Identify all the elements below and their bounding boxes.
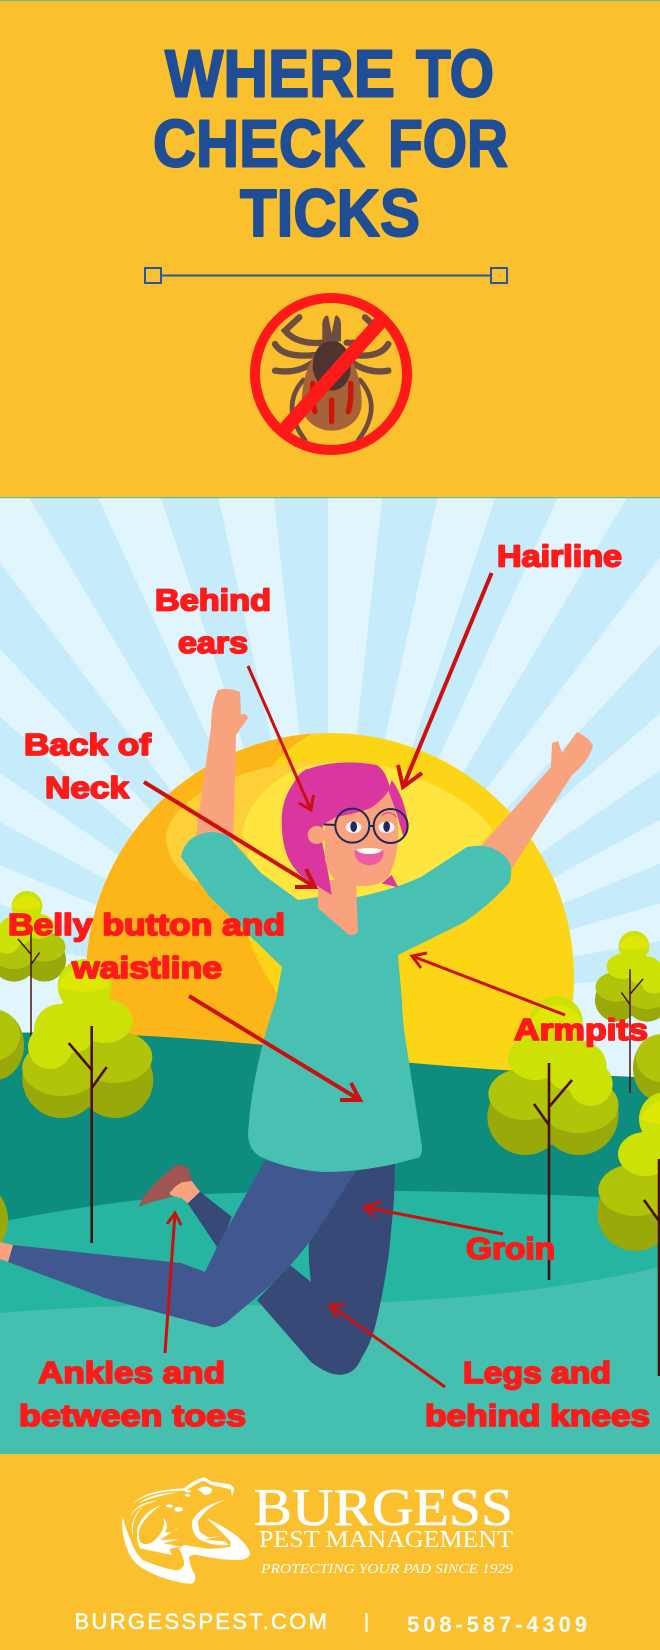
label: back of neck: Neck: [45, 771, 129, 805]
label: ankles and between toes: between toes: [19, 1399, 246, 1433]
label: legs and behind knees: behind knees: [425, 1399, 650, 1433]
icon: Burgess frog logo: [122, 1477, 250, 1584]
tree: right edge partial: [633, 1034, 660, 1101]
arrow: armpits: [412, 953, 565, 1015]
company name: PEST MANAGEMENT: [259, 1527, 513, 1553]
label: back of neck: Back of: [24, 728, 152, 762]
person: neck: [318, 880, 358, 935]
tree: left edge partial: [0, 1009, 24, 1260]
title: FOR: [388, 106, 508, 182]
arrow: groin: [364, 1202, 503, 1234]
arrow: belly button: [189, 996, 360, 1100]
label: ankles and between toes: Ankles and: [38, 1356, 225, 1390]
hills: [0, 1032, 660, 1460]
label: legs and behind knees: Legs and: [463, 1356, 611, 1390]
title: [153, 36, 508, 251]
person jumping: [0, 689, 593, 1375]
label: behind ears: [155, 584, 271, 660]
title: TO: [416, 36, 494, 112]
icon: prohibition sign: [255, 298, 407, 450]
tree: right main: [487, 996, 618, 1280]
arrow: ankles: [165, 1213, 181, 1353]
icon: crossed-out tick: [255, 298, 407, 450]
arrow: back of neck: [144, 782, 315, 887]
label: groin: Groin: [466, 1232, 555, 1266]
arrow: hairline: [398, 573, 492, 787]
label: behind ears: ears: [178, 626, 248, 660]
company name: BURGESS: [254, 1479, 513, 1537]
tree: far left small: [0, 891, 66, 1053]
label: ankles and between toes: [19, 1356, 246, 1433]
arrow: legs: [330, 1305, 445, 1387]
title divider: [145, 268, 507, 283]
label: back of neck: [24, 728, 152, 805]
person: head: [282, 762, 408, 895]
label: behind ears: Behind: [155, 584, 271, 618]
title: WHERE: [165, 36, 395, 112]
title: CHECK: [153, 106, 365, 182]
person: raised arms: [194, 689, 593, 870]
tagline: PROTECTING YOUR PAD SINCE 1929: [260, 1562, 513, 1577]
panel: footer background: [0, 1454, 660, 1650]
footer contact line: 508-587-4309: [407, 1612, 587, 1637]
person: front leg: [8, 1160, 356, 1327]
label: belly button and waistline: waistline: [71, 951, 222, 985]
arrow: behind ears: [248, 666, 314, 810]
person: back leg: [188, 1163, 395, 1375]
label: hairline: Hairline: [497, 540, 622, 574]
person: foot and shoe: [0, 1165, 200, 1262]
panel: header background: [0, 0, 660, 498]
footer contact line: BURGESSPEST.COM: [74, 1609, 327, 1634]
title: TICKS: [240, 176, 420, 251]
label: legs and behind knees: [425, 1356, 650, 1433]
tree: right small: [595, 931, 660, 1093]
icon: tick: [275, 315, 388, 440]
tree: right edge lower: [597, 1092, 660, 1376]
company name: [254, 1479, 513, 1577]
tree: left main: [22, 959, 153, 1243]
sun: [86, 733, 574, 1070]
label: belly button and waistline: Belly button and: [8, 908, 285, 942]
footer contact line: [74, 1609, 587, 1637]
person: shirt: [181, 832, 511, 1172]
label: armpits: Armpits: [514, 1013, 648, 1047]
label: belly button and waistline: [8, 908, 285, 985]
